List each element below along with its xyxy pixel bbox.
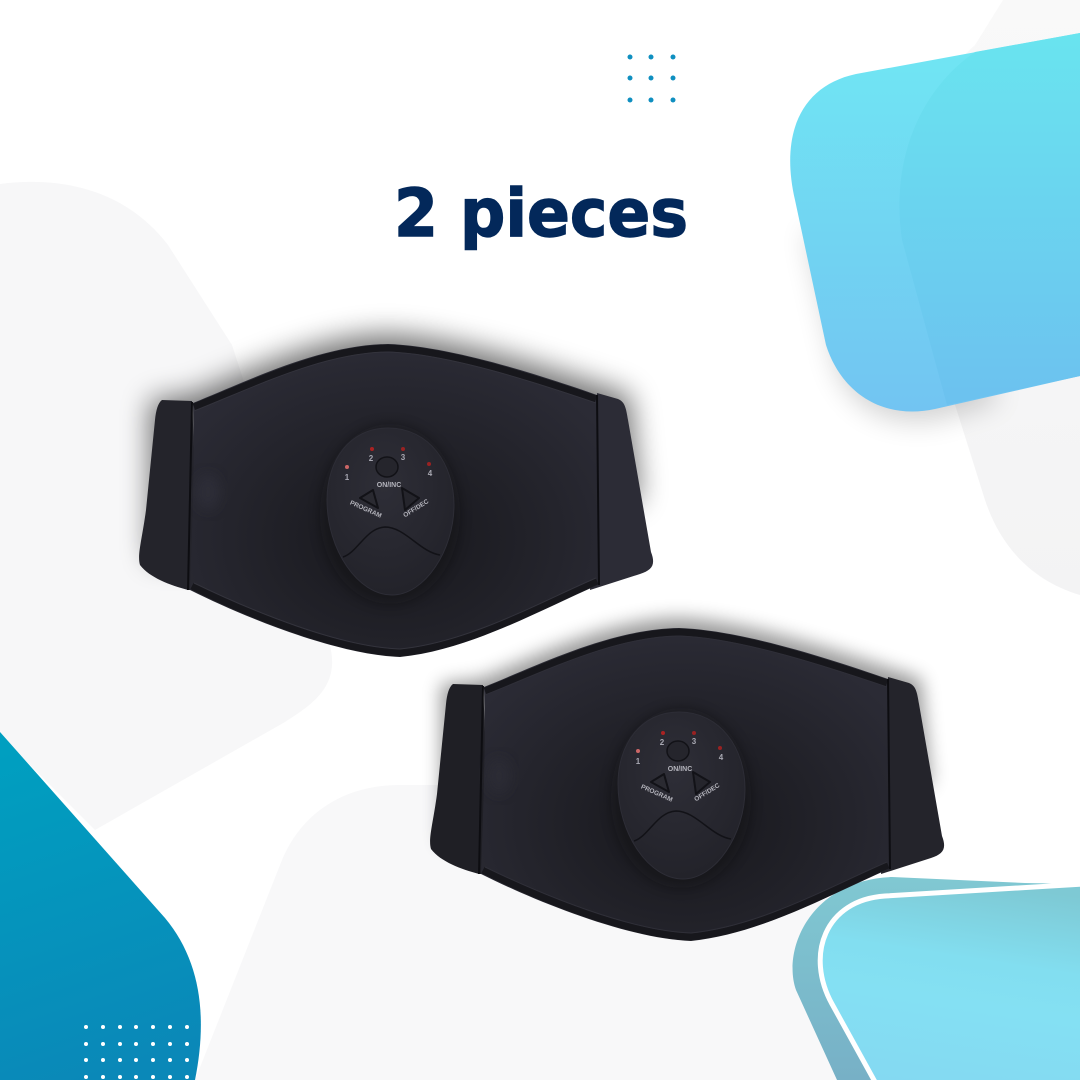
belt 1 stitching xyxy=(194,352,596,649)
belt 2 shadow xyxy=(441,618,931,844)
background shape: large grey left xyxy=(0,182,332,830)
belt 2 pod shadow xyxy=(611,708,751,888)
belt 1 control pod: OFF/DEC xyxy=(402,498,430,519)
shape: teal rounded panel bottom left xyxy=(0,732,201,1080)
title: 2 pieces xyxy=(394,175,688,252)
belt 1 control pod: 3 xyxy=(401,453,406,462)
shape: aqua rounded panel bottom right xyxy=(793,877,1080,1080)
background shape: grey bottom centre xyxy=(195,785,880,1080)
belt 2 control pod: ON/INC xyxy=(668,766,692,773)
belt 1 piping xyxy=(192,348,597,653)
belt 2 control pod: PROGRAM xyxy=(640,784,674,804)
belt 2 wrinkle xyxy=(487,758,511,794)
belt 2 control pod: 2 xyxy=(660,738,665,747)
belt 1 control pod: 2 xyxy=(369,454,374,463)
belt 1 control pod: 1 xyxy=(345,473,350,482)
belt 1 pod shadow xyxy=(320,424,460,604)
belt 2 piping xyxy=(483,632,888,937)
product: belt 1 xyxy=(139,334,653,657)
product: belt 2 xyxy=(430,618,944,941)
belt 2 control pod: 4 xyxy=(719,753,724,762)
shape: cyan rounded panel top right xyxy=(790,33,1080,421)
belt 2 fabric body xyxy=(481,628,889,941)
dot grid: white bottom left xyxy=(84,1025,189,1079)
belt 1 straps xyxy=(139,400,200,590)
belt 1 wrinkle xyxy=(196,474,220,510)
belt 2 stitching xyxy=(485,636,887,933)
belt 2 straps xyxy=(430,684,491,874)
belt 1 shadow xyxy=(150,334,640,560)
background shape: grey upper right xyxy=(898,0,1080,595)
belt 2 control pod: 1 xyxy=(636,757,641,766)
belt 1 control pod: 4 xyxy=(428,469,433,478)
belt 1 fabric body xyxy=(190,344,598,657)
dot grid: blue top xyxy=(628,54,676,102)
belt 1 control pod xyxy=(327,428,454,595)
belt 2 control pod: OFF/DEC xyxy=(693,782,721,803)
belt 2 seams xyxy=(479,679,890,874)
belt 1 control pod: PROGRAM xyxy=(349,500,383,520)
belt 2 control pod: 3 xyxy=(692,737,697,746)
belt 1 seams xyxy=(188,395,599,590)
belt 2 control pod xyxy=(618,712,745,879)
belt 1 control pod: ON/INC xyxy=(377,482,401,489)
